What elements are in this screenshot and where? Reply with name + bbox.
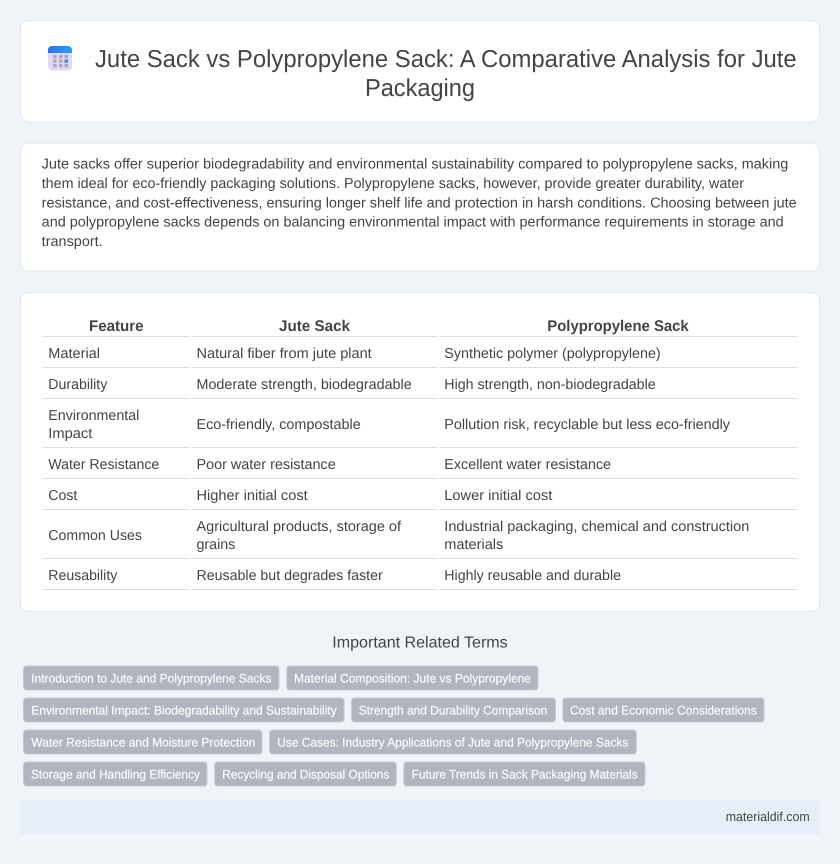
- row: durability: [48, 377, 656, 393]
- heading: important related terms: Important Related Terms: [332, 635, 508, 652]
- panel: intro text: and polypropylene sacks depends on balancing environmental impact with performance requirements in storage and: [42, 215, 784, 231]
- row: material: [48, 346, 661, 362]
- row: reusability: [48, 568, 621, 584]
- row: common uses: Industrial packaging, chemical and construction: [444, 519, 749, 535]
- row: reusability: Highly reusable and durable: [444, 568, 621, 584]
- tag: Introduction to Jute and Polypropylene Sacks: [31, 671, 271, 685]
- tag: [24, 730, 262, 754]
- row: durability: Moderate strength, biodegradable: [196, 377, 412, 393]
- row: reusability: Reusability: [48, 568, 118, 584]
- row: cost: Cost: [48, 488, 77, 504]
- row: material: Synthetic polymer (polypropylene): [444, 346, 661, 362]
- row: common uses: Common Uses: [48, 528, 142, 544]
- row: reusability: Reusable but degrades faster: [196, 568, 383, 584]
- row: environmental impact: [48, 408, 731, 442]
- row: environmental impact: Impact: [48, 426, 92, 442]
- row: common uses: [48, 519, 749, 553]
- row: water resistance: [48, 457, 611, 473]
- row: common uses: materials: [444, 537, 503, 553]
- tag: Environmental Impact: Biodegradability and Sustainability: [31, 703, 337, 717]
- tag: [352, 698, 556, 722]
- table header: [89, 318, 689, 335]
- tag: Storage and Handling Efficiency: [31, 767, 201, 781]
- row: environmental impact: Environmental: [48, 408, 139, 424]
- panel: intro text: transport.: [42, 234, 103, 250]
- row: cost: Lower initial cost: [444, 488, 552, 504]
- footer bar: [20, 800, 820, 834]
- panel: intro text: [20, 143, 820, 271]
- row: common uses: Agricultural products, storage of: [196, 519, 402, 535]
- tag: [24, 666, 279, 690]
- panel: title card: [20, 20, 820, 122]
- tag: [563, 698, 764, 722]
- panel: comparison table: [20, 292, 820, 612]
- row: durability: Durability: [48, 377, 108, 393]
- panel: intro text: them ideal for eco-friendly packaging solutions. Polypropylene sacks, however, provide greater durability, water: [42, 176, 744, 192]
- row: water resistance: Excellent water resistance: [444, 457, 611, 473]
- row: water resistance: Water Resistance: [48, 457, 159, 473]
- tag: [287, 666, 538, 690]
- title: Jute Sack vs Polypropylene Sack: A Comparative Analysis for Jute: [95, 46, 797, 73]
- row: material: Natural fiber from jute plant: [196, 346, 372, 362]
- table header: Feature: [89, 318, 144, 335]
- tag: Material Composition: Jute vs Polypropylene: [294, 671, 531, 685]
- tag: [404, 762, 645, 786]
- row: environmental impact: Pollution risk, recyclable but less eco-friendly: [444, 417, 731, 433]
- tag: [24, 698, 344, 722]
- tag: Water Resistance and Moisture Protection: [31, 735, 255, 749]
- row: cost: Higher initial cost: [196, 488, 308, 504]
- title: Packaging: [365, 75, 475, 102]
- tag: Use Cases: Industry Applications of Jute and Polypropylene Sacks: [277, 735, 628, 749]
- tag: [215, 762, 396, 786]
- row: common uses: grains: [196, 537, 235, 553]
- row: environmental impact: Eco-friendly, compostable: [196, 417, 361, 433]
- footer bar: materialdif.com: [726, 809, 810, 824]
- row: water resistance: Poor water resistance: [196, 457, 336, 473]
- tag: Strength and Durability Comparison: [359, 703, 547, 717]
- panel: intro text: Jute sacks offer superior biodegradability and environmental sustainability compared to polypropylene sacks, making: [42, 156, 788, 172]
- row: material: Material: [48, 346, 100, 362]
- panel: intro text: resistance, and cost-effectiveness, ensuring longer shelf life and protection in harsh conditions. Choosing between jute: [42, 196, 797, 212]
- panel: related term tags: [24, 666, 764, 786]
- title: [95, 46, 797, 102]
- icon: calendar: [48, 46, 72, 70]
- table header: Polypropylene Sack: [547, 318, 689, 335]
- tag: [270, 730, 636, 754]
- row: cost: [48, 488, 552, 504]
- table header: Jute Sack: [279, 318, 350, 335]
- row: durability: High strength, non-biodegradable: [444, 377, 656, 393]
- tag: Cost and Economic Considerations: [570, 703, 757, 717]
- tag: Recycling and Disposal Options: [222, 767, 389, 781]
- tag: [24, 762, 207, 786]
- tag: Future Trends in Sack Packaging Materials: [412, 767, 638, 781]
